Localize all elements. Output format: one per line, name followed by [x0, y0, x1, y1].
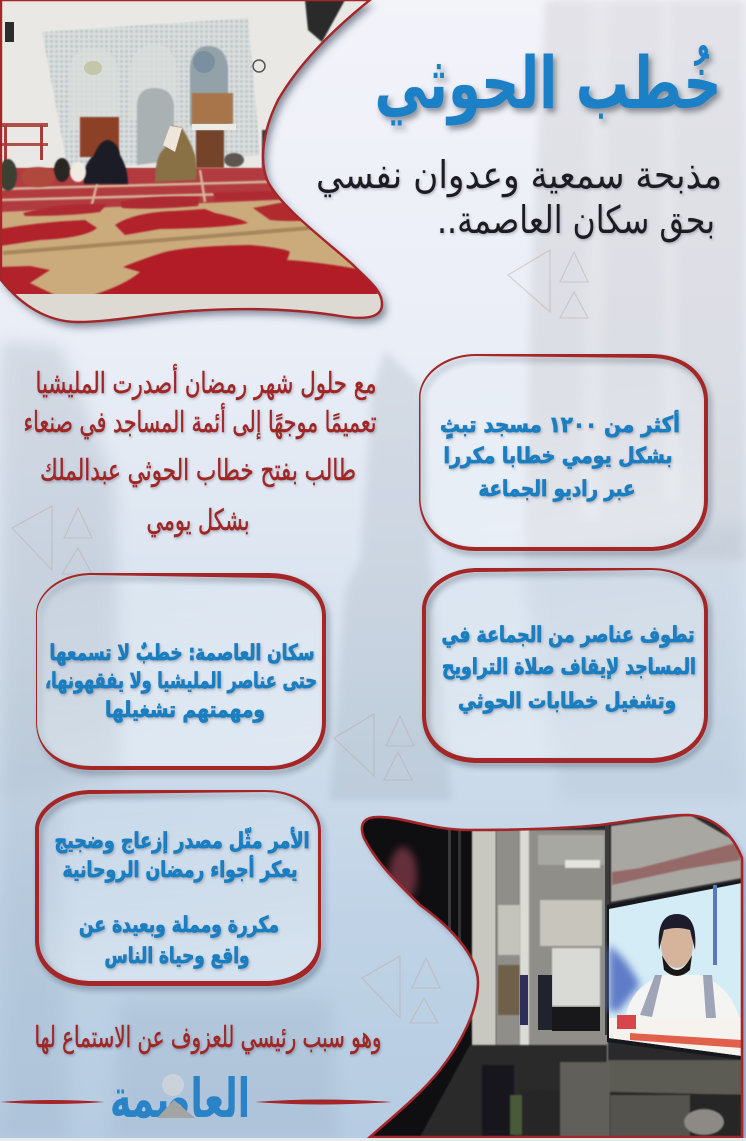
panel text	[54, 826, 310, 969]
panel: source of noise	[35, 790, 321, 986]
subtitle	[316, 153, 722, 243]
panel frame	[419, 354, 708, 551]
bottom edge strip	[0, 1138, 746, 1141]
panel: 1200 mosques	[419, 354, 708, 551]
logo wordmark: العاصمة	[110, 1067, 250, 1130]
mosque photo contents	[0, 0, 390, 334]
intro text	[24, 363, 376, 538]
panel frame	[35, 790, 321, 986]
top photo: mosque interior	[0, 0, 390, 334]
logo house mark	[157, 1100, 195, 1118]
panel fill	[425, 570, 706, 760]
panel text	[45, 641, 317, 723]
panel text: الأمر مثّل مصدر إزعاج وضجيج	[54, 826, 310, 854]
panel text: بشكل يومي خطابا مكررا	[444, 444, 672, 469]
logo	[0, 1067, 392, 1130]
panel text: واقع وحياة الناس	[104, 944, 250, 969]
panel fill	[421, 356, 705, 547]
decorative triangles	[12, 250, 588, 1023]
closing text: وهو سبب رئيسي للعزوف عن الاستماع لها	[34, 1020, 382, 1055]
logo circle mark	[162, 1074, 184, 1096]
panel text: وتشغيل خطابات الحوثي	[458, 689, 676, 714]
panel text: حتى عناصر المليشيا ولا يفقهونها،	[45, 669, 317, 694]
intro text: طالب بفتح خطاب الحوثي عبدالملك	[40, 453, 356, 488]
panel frame	[36, 573, 326, 770]
panel text: سكان العاصمة: خطبٌ لا تسمعها	[50, 641, 314, 666]
bottom photo: shop television	[360, 810, 746, 1140]
photo frame	[1, 0, 382, 322]
panel text: أكثر من ١٢٠٠ مسجد تبثٍ	[440, 409, 680, 440]
logo rule left	[0, 1100, 105, 1104]
intro text: تعميمًا موجهًا إلى أئمة المساجد في صنعاء	[24, 402, 376, 440]
panel text: مكررة ومملة وبعيدة عن	[79, 913, 279, 938]
panel: Houthi elements tour mosques	[422, 568, 708, 763]
panel text: يعكر أجواء رمضان الروحانية	[62, 854, 298, 883]
panel text	[442, 623, 696, 714]
intro text: بشكل يومي	[146, 503, 250, 538]
panel text: عبر راديو الجماعة	[478, 477, 636, 502]
photo shadow	[362, 815, 742, 1137]
panel text	[440, 409, 680, 502]
logo rule right	[255, 1100, 392, 1104]
panel text: ومهمتهم تشغيلها	[105, 698, 265, 723]
photo frame	[362, 815, 742, 1137]
panel fill	[38, 575, 324, 767]
photo contents	[360, 810, 746, 1140]
photo shadow	[0, 0, 382, 322]
intro text: مع حلول شهر رمضان أصدرت المليشيا	[36, 363, 376, 400]
panel fill	[38, 793, 320, 982]
panel: capital residents	[36, 573, 326, 770]
panel frame	[422, 568, 708, 763]
